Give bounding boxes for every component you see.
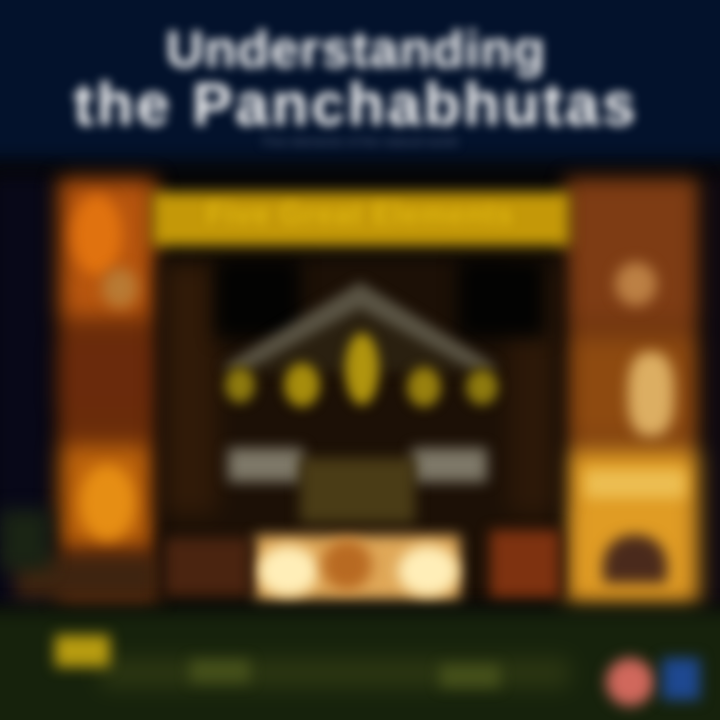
- left column middle card: [62, 343, 152, 408]
- logo: blue: [662, 658, 700, 700]
- left column lower card: [62, 446, 150, 546]
- footer: [0, 610, 720, 720]
- bright right glow: [398, 546, 458, 596]
- lower right red block: [490, 530, 560, 598]
- flame highlight: [102, 268, 138, 308]
- dark top right: [458, 258, 546, 338]
- right pillar: [508, 265, 558, 515]
- header background: [0, 0, 720, 160]
- lower left glow: [80, 465, 135, 540]
- footer plant left: [0, 510, 50, 570]
- bright left glow: [258, 546, 318, 596]
- right middle icon: [628, 352, 674, 436]
- lower glow panel: [255, 535, 460, 600]
- panel: centre building: [162, 255, 558, 600]
- hearth glow: [585, 470, 685, 498]
- footer yellow label: [55, 635, 110, 667]
- panel: right column: [566, 178, 698, 603]
- right dark edge: [706, 175, 720, 605]
- lamps row: [218, 326, 506, 415]
- middle text band: [228, 448, 303, 482]
- footer speckle right: [440, 665, 500, 687]
- middle text band right: [412, 448, 487, 482]
- title: [68, 21, 640, 138]
- subtitle: Five elements of the natural world: [262, 134, 458, 149]
- title: the Panchabhutas: [74, 71, 638, 138]
- roof: [222, 278, 498, 374]
- footer text streak: [100, 658, 570, 688]
- right column top card: [569, 184, 694, 319]
- yellow banner: [152, 192, 570, 246]
- footer speckle left: [190, 660, 250, 682]
- right column bottom card: [566, 450, 698, 603]
- right column middle card: [569, 338, 694, 438]
- logo: red: [606, 658, 654, 706]
- centre band: [300, 458, 415, 523]
- left dark edge: [0, 175, 52, 605]
- hearth arch: [603, 535, 667, 583]
- title: Understanding: [166, 21, 546, 79]
- dark top left: [215, 258, 300, 338]
- lower left red block: [165, 538, 250, 596]
- left pillar: [162, 265, 217, 515]
- right top icon: [615, 262, 657, 306]
- fire highlight top: [72, 195, 122, 275]
- left column base: [15, 555, 160, 600]
- panel: left column: [58, 178, 158, 603]
- left column fire card: [62, 182, 152, 317]
- bright centre flame: [322, 540, 372, 590]
- banner text: Five Great Elements: [206, 198, 514, 231]
